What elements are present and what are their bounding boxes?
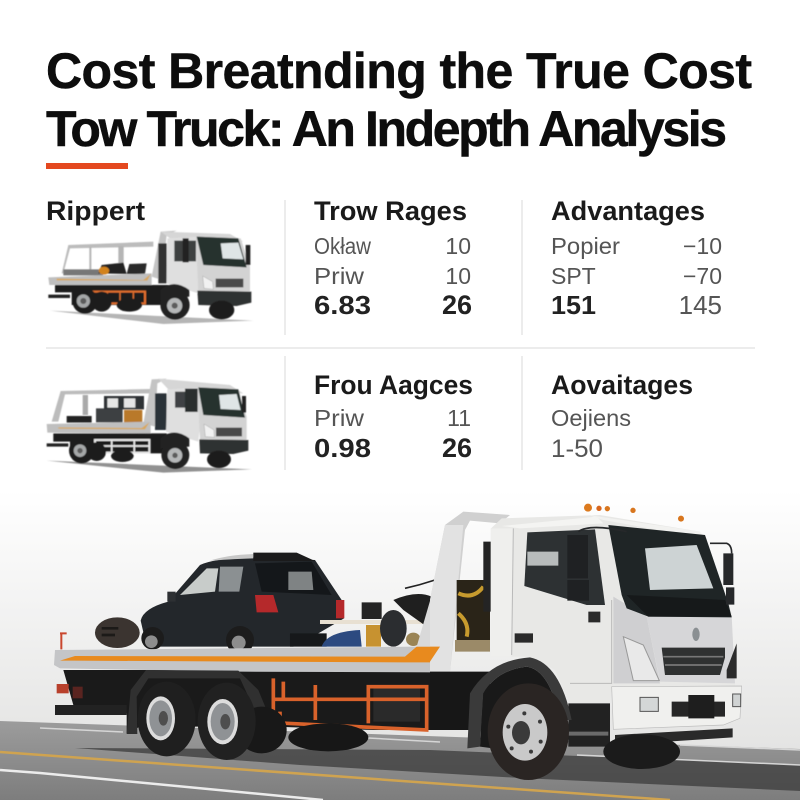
panel: lower rates: 0.98 [314, 433, 371, 463]
cargo: machinery [322, 580, 435, 647]
panel: lower rates: 26 [442, 433, 472, 463]
mirrors [567, 535, 589, 601]
cargo: black car [141, 553, 427, 654]
title [46, 43, 752, 157]
panel: upper rates: Trow Rages [314, 196, 467, 226]
icon: lower tow truck [47, 379, 252, 473]
panel: lower advantages: Oejiens [551, 405, 631, 431]
side window [524, 529, 605, 605]
panel: upper advantages [551, 196, 722, 320]
panel: lower advantages [551, 370, 693, 463]
title: Cost Breatnding the True Cost [46, 43, 752, 99]
cab body [491, 515, 735, 703]
panel: upper rates [314, 196, 472, 320]
backdrop [0, 490, 800, 750]
flatbed [54, 647, 440, 672]
panel: upper advantages: 151 [551, 290, 596, 320]
panel: lower rates: 11 [447, 405, 471, 431]
panel: upper rates: 10 [445, 263, 471, 289]
icon: upper tow truck [48, 231, 253, 324]
panel: upper advantages: SPT [551, 263, 596, 289]
markers [584, 504, 592, 512]
panel: upper advantages: 145 [679, 290, 722, 320]
cargo: tyre [95, 617, 140, 648]
panel: upper rates: 26 [442, 290, 472, 320]
panel: lower rates [314, 370, 473, 463]
headboard [430, 512, 510, 672]
accent bar [46, 163, 128, 169]
road [0, 721, 800, 800]
title: Tow Truck: An Indepth Analysis [46, 101, 727, 157]
truck front: cab and wheels [430, 504, 742, 780]
chassis [55, 670, 440, 733]
front wheels [603, 734, 680, 769]
panel: upper advantages: Advantages [551, 196, 705, 226]
panel: lower rates: Frou Aagces [314, 370, 473, 400]
panel: lower rates: Priw [314, 405, 364, 431]
heading: Rippert: Rippert [46, 196, 145, 226]
orange rail [273, 678, 427, 730]
rear wheels [288, 723, 368, 751]
truck rear: bed, car and wheels [54, 553, 440, 760]
tanks [373, 687, 420, 722]
panel: upper advantages: −10 [683, 233, 722, 259]
panel: upper rates: 6.83 [314, 290, 371, 320]
panel: upper advantages: Popier [551, 233, 620, 259]
grille and lights [662, 648, 725, 675]
panel: upper rates: Okław [314, 233, 371, 259]
panel: upper rates: Priw [314, 263, 364, 289]
main tow truck [54, 504, 742, 780]
panel: upper rates: 10 [445, 233, 471, 259]
panel: upper advantages: −70 [683, 263, 722, 289]
fender [127, 670, 270, 734]
panel: lower advantages: 1-50 [551, 435, 603, 463]
panel: lower advantages: Aovaitages [551, 370, 693, 400]
windscreen [608, 525, 732, 617]
bumper [612, 686, 742, 729]
